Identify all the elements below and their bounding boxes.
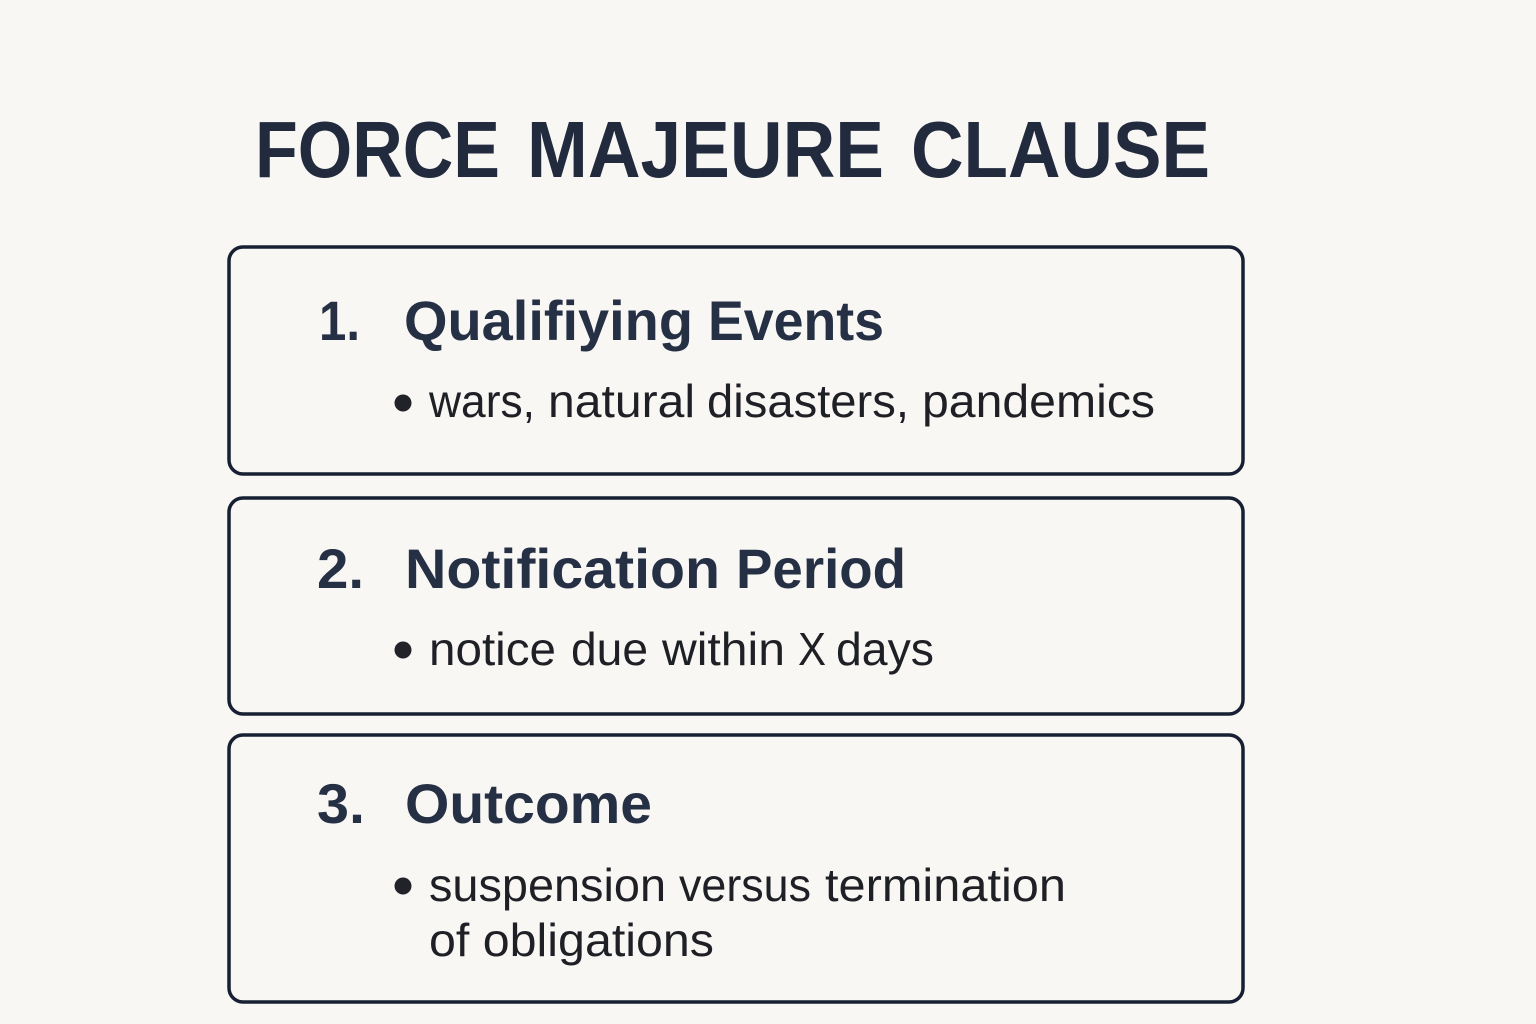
bullet text: X	[798, 623, 826, 675]
panel: notification period	[229, 498, 1243, 714]
bullet text: wars,	[428, 375, 535, 427]
title: FORCE	[255, 105, 500, 194]
heading: notification period: Notification	[405, 537, 720, 600]
bullet text: disasters,	[707, 375, 909, 427]
bullet text	[429, 859, 1066, 966]
number 1: 1.	[319, 289, 360, 352]
bullet text: due	[571, 623, 648, 675]
bullet text: versus	[679, 859, 811, 911]
heading: outcome: Outcome	[405, 772, 652, 835]
title	[255, 105, 1210, 194]
heading: qualifying events: Qualifiying	[404, 289, 693, 352]
title: MAJEURE	[527, 105, 884, 194]
bullet text: notice	[429, 623, 556, 675]
bullet	[394, 878, 412, 894]
bullet text	[428, 375, 1155, 427]
heading: qualifying events	[404, 289, 884, 352]
panel: qualifying events	[229, 247, 1243, 474]
bullet text: natural	[548, 375, 695, 427]
panel: outcome	[229, 735, 1243, 1002]
bullet text: suspension	[429, 859, 666, 911]
bullet text: within	[661, 623, 785, 675]
heading: notification period	[405, 537, 906, 600]
heading: notification period: Period	[736, 537, 906, 600]
bullet text: days	[836, 623, 934, 675]
number 2: 2.	[317, 537, 364, 600]
number 3: 3.	[317, 772, 365, 835]
bullet text: pandemics	[922, 375, 1155, 427]
heading: qualifying events: Events	[708, 289, 884, 352]
bullet text: termination	[825, 859, 1066, 911]
bullet	[394, 642, 412, 658]
title: CLAUSE	[911, 105, 1210, 194]
bullet text: of obligations	[429, 914, 714, 966]
bullet text	[429, 623, 934, 675]
bullet	[394, 394, 412, 412]
